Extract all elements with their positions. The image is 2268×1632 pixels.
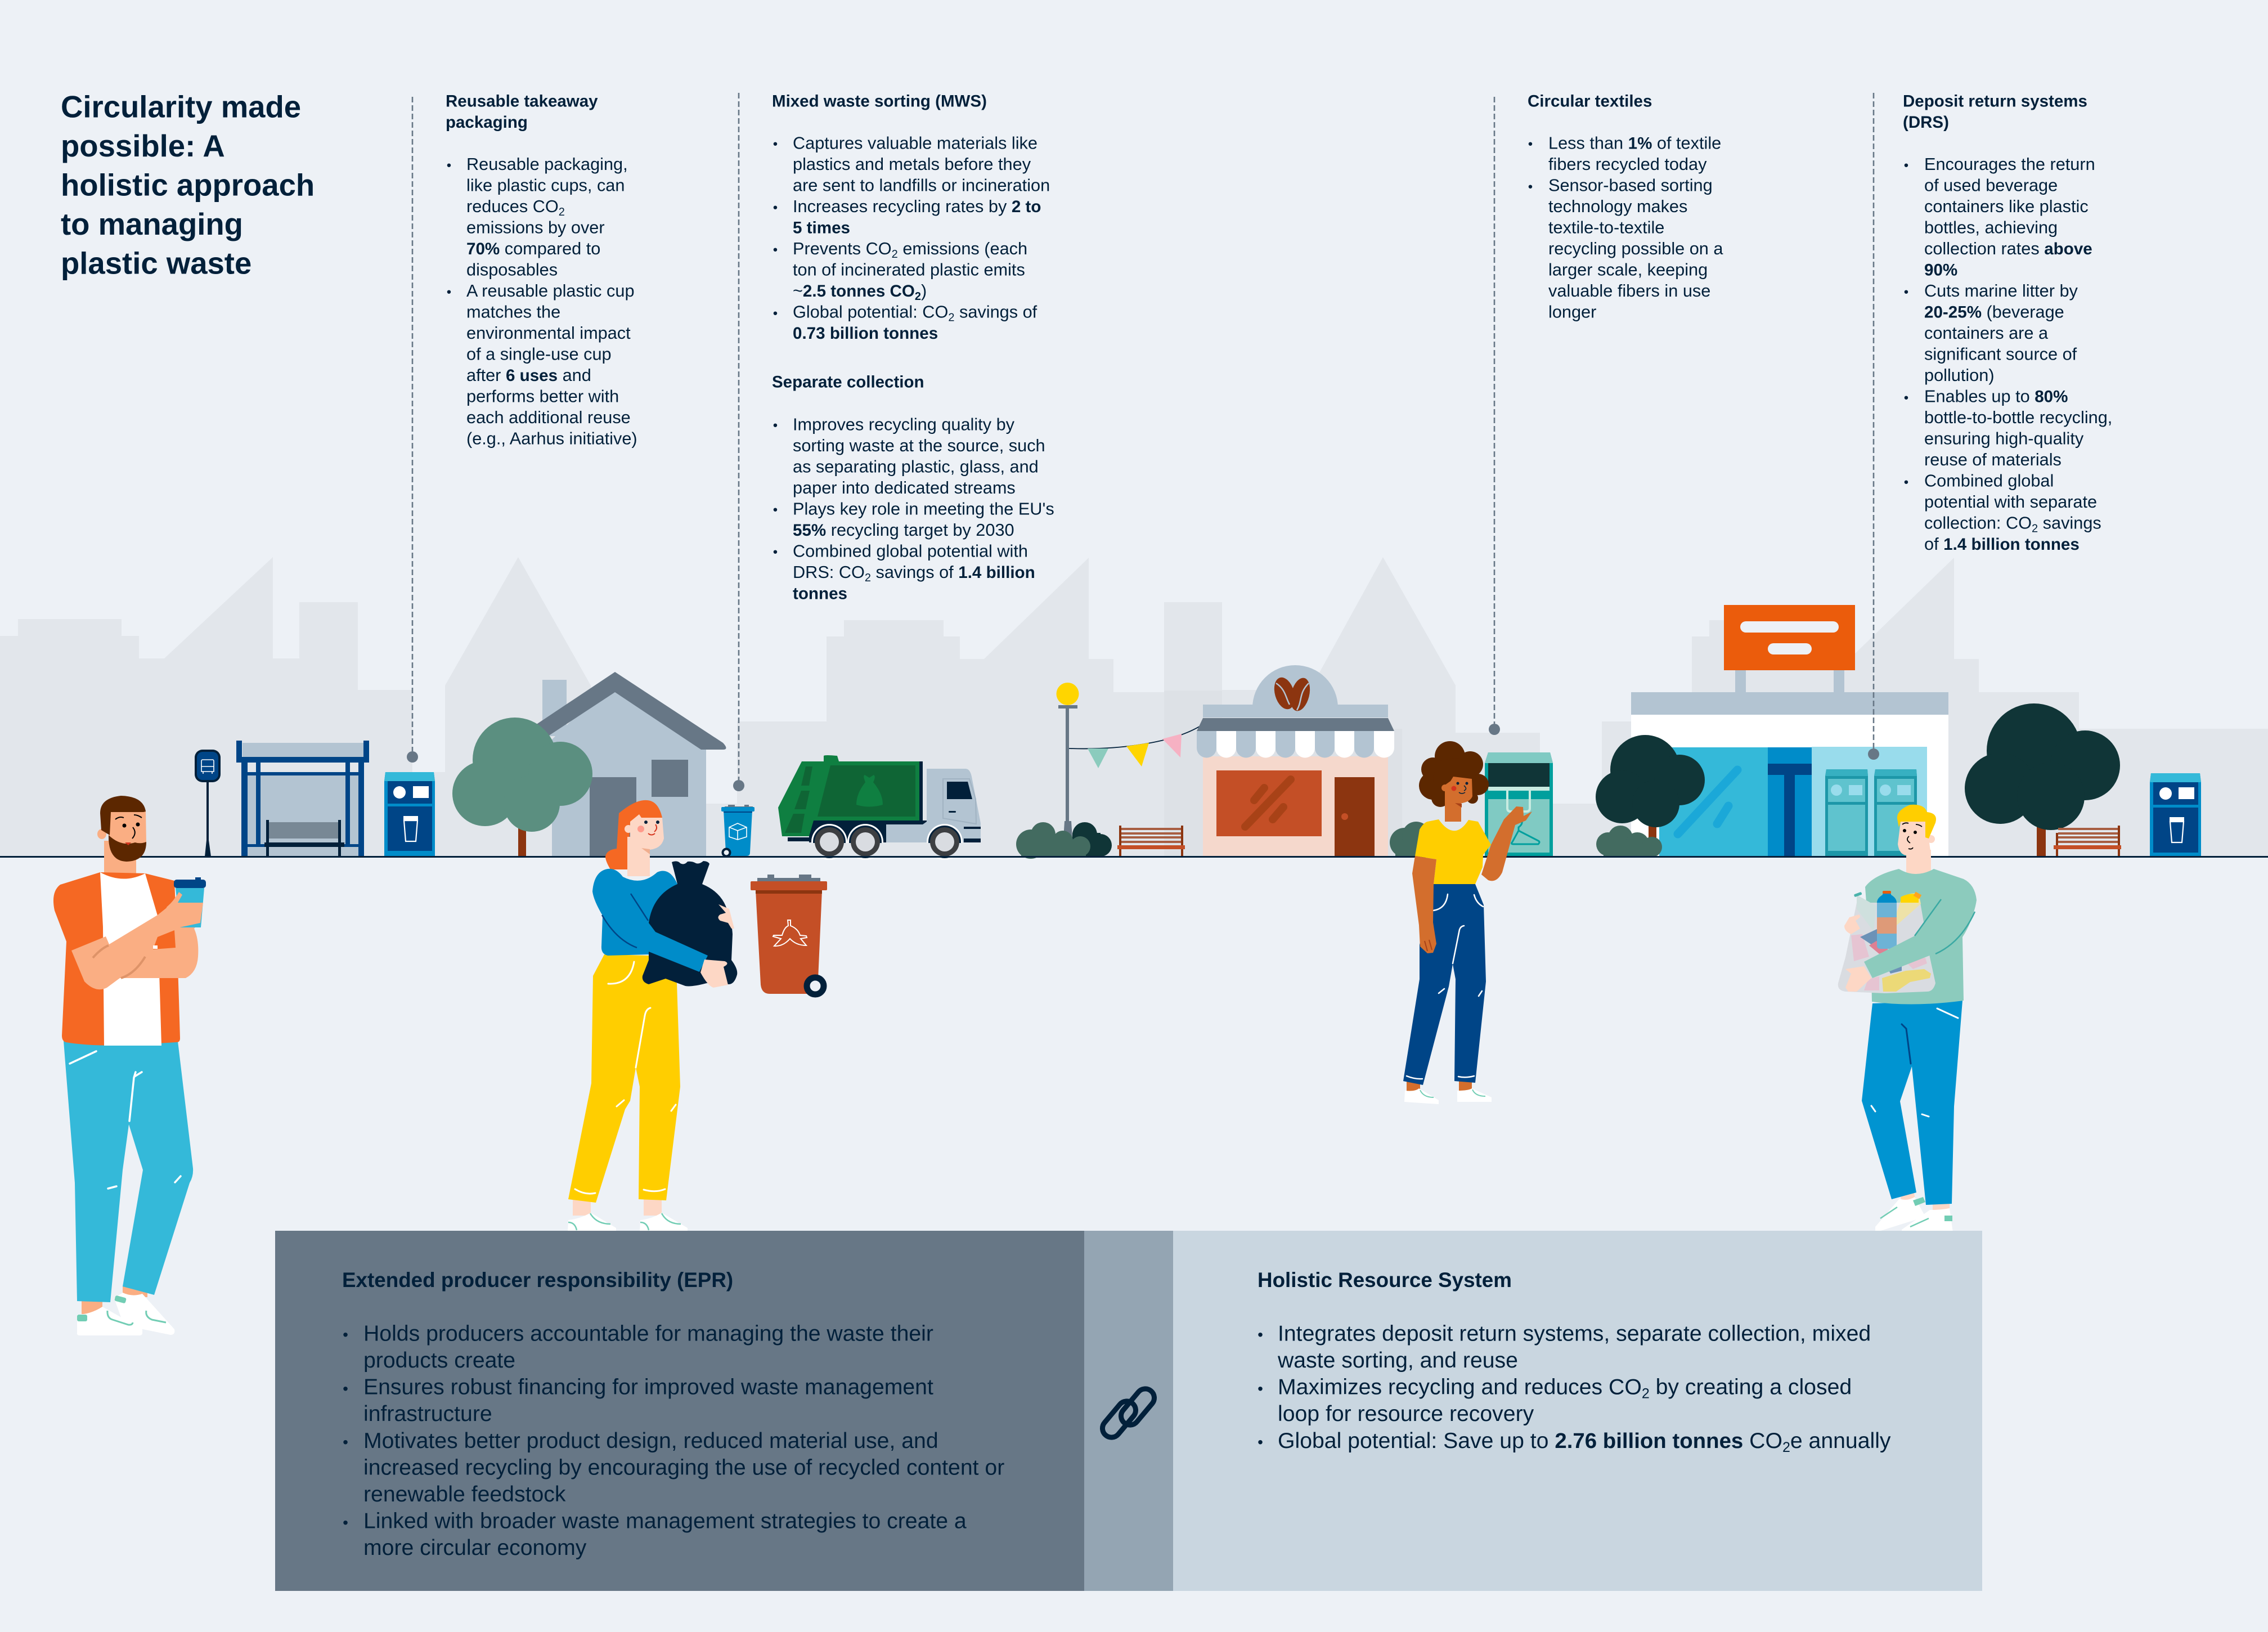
drink return machines in store <box>1825 769 1917 857</box>
text block: reusable takeaway packaging: environmental impact <box>466 323 631 343</box>
text block: mixed waste sorting: 5 times <box>793 218 850 237</box>
panel: holistic resource system: • <box>1257 1326 1263 1343</box>
text block: circular textiles: textile-to-textile <box>1548 217 1664 237</box>
text block: separate collection: 1.4 billion <box>958 563 1035 582</box>
text block: deposit return systems: • <box>1904 285 1908 299</box>
text block: reusable takeaway packaging: of a single-use cup <box>466 344 612 364</box>
text block: deposit return systems: 2 <box>2032 522 2038 535</box>
cup <box>167 877 206 929</box>
neck and face <box>625 814 664 876</box>
bushes by lamp <box>1016 822 1112 859</box>
text block: mixed waste sorting: ton of incinerated plastic emits <box>793 260 1025 279</box>
text block: reusable takeaway packaging: matches the <box>466 302 560 322</box>
garbage truck <box>778 755 981 860</box>
head <box>97 796 146 862</box>
text block: mixed waste sorting: Captures valuable materials like <box>793 133 1038 153</box>
text block: separate collection: 55% recycling target by 2030 <box>793 520 1014 540</box>
panel: holistic resource system: 2 <box>1782 1440 1790 1455</box>
lamp post with bunting <box>1057 683 1201 857</box>
text block: reusable takeaway packaging: after 6 uses and <box>466 365 591 385</box>
text block: deposit return systems: Cuts marine litter by <box>1924 281 2078 301</box>
text block: circular textiles: • <box>1528 136 1533 152</box>
text block: separate collection: DRS: CO <box>793 562 865 582</box>
text block: deposit return systems: pollution) <box>1924 365 1995 385</box>
panel: extended producer responsibility: Holds producers accountable for managing the waste their <box>363 1321 933 1346</box>
text block: circular textiles: Sensor-based sorting <box>1548 176 1713 195</box>
icon: chain link <box>1099 1385 1158 1441</box>
text block: deposit return systems: savings <box>2038 513 2101 532</box>
text block: reusable takeaway packaging: disposables <box>466 260 558 279</box>
shirt <box>53 872 180 1046</box>
text block: reusable takeaway packaging: • <box>447 158 451 173</box>
heading: title: holistic approach <box>61 168 315 203</box>
person: man with reusable cup <box>53 796 206 1335</box>
text block: reusable takeaway packaging: 2 <box>559 206 565 218</box>
shoes <box>77 1293 174 1335</box>
panel: holistic resource system: loop for resource recovery <box>1278 1402 1534 1426</box>
panel: holistic resource system: • <box>1257 1380 1263 1397</box>
panel: holistic resource system: Integrates deposit return systems, separate collection, mixed <box>1278 1321 1871 1346</box>
text block: deposit return systems: of 1.4 billion tonnes <box>1924 534 2080 554</box>
shoes <box>568 1213 688 1232</box>
text block: mixed waste sorting: • <box>773 242 778 258</box>
icon: banana peel <box>773 920 807 946</box>
text block: mixed waste sorting: Global potential: CO <box>793 302 948 322</box>
panel: extended producer responsibility: • <box>343 1514 348 1531</box>
sweater <box>1865 869 1977 1005</box>
text block: separate collection: tonnes <box>793 584 847 603</box>
text block: deposit return systems: 90% <box>1924 261 1957 279</box>
bag <box>643 861 737 986</box>
trousers <box>1403 884 1486 1085</box>
heading: title: to managing <box>61 207 243 241</box>
arm over bag <box>603 894 708 972</box>
text block: reusable takeaway packaging: like plastic cups, can <box>466 176 625 195</box>
text block: reusable takeaway packaging: Reusable takeaway <box>446 92 598 110</box>
text block: mixed waste sorting: 0.73 billion tonnes <box>793 324 938 343</box>
text block: deposit return systems: • <box>1904 158 1908 173</box>
tree: dark small with bush <box>1596 735 1705 857</box>
heading: title <box>61 90 315 280</box>
supermarket sign <box>1724 605 1855 670</box>
text block: separate collection: Separate collection <box>772 373 924 392</box>
city skyline background <box>0 557 2268 857</box>
text block: mixed waste sorting: • <box>773 306 778 321</box>
panel: holistic resource system <box>1173 1231 1982 1591</box>
text block: separate collection: 2 <box>865 572 871 584</box>
hands <box>1844 914 1871 992</box>
reverse vending machine: left <box>384 772 435 857</box>
text block: reusable takeaway packaging: • <box>447 285 451 299</box>
text block: mixed waste sorting: Prevents CO <box>793 239 892 258</box>
panel: extended producer responsibility <box>275 1231 1084 1591</box>
panel: holistic resource system: by creating a closed <box>1650 1375 1852 1399</box>
brown organic waste bin <box>751 875 827 994</box>
text block: reusable takeaway packaging: packaging <box>446 113 528 132</box>
text block: mixed waste sorting: Mixed waste sorting (MWS) <box>772 92 987 110</box>
text block: mixed waste sorting: savings of <box>954 302 1038 322</box>
text block: deposit return systems <box>1903 92 2112 554</box>
reverse vending machine: right <box>2150 773 2201 858</box>
text block: separate collection: • <box>773 502 778 518</box>
text block: deposit return systems: of used beverage <box>1924 176 2058 195</box>
text block: separate collection: • <box>773 545 778 559</box>
panel: extended producer responsibility: products create <box>363 1348 515 1373</box>
panel: holistic resource system: e annually <box>1790 1429 1891 1453</box>
text block: reusable takeaway packaging: performs better with <box>466 386 619 406</box>
person: man carrying bag of bottles <box>1838 805 1977 1232</box>
panel: holistic resource system: 2 <box>1642 1386 1650 1401</box>
panel: extended producer responsibility: infrastructure <box>363 1402 492 1426</box>
sweater <box>592 869 677 956</box>
text block: separate collection: paper into dedicated streams <box>793 478 1016 497</box>
text block: mixed waste sorting: • <box>773 200 778 215</box>
hand and raised arm <box>1481 806 1532 881</box>
text block: mixed waste sorting: ~2.5 tonnes CO <box>793 281 915 301</box>
text block: deposit return systems: • <box>1904 391 1908 405</box>
panel: extended producer responsibility: increased recycling by encouraging the use of recycled content or <box>363 1455 1004 1479</box>
text block: mixed waste sorting: 2 <box>948 312 954 324</box>
panel: extended producer responsibility: • <box>343 1380 348 1397</box>
text block: separate collection: as separating plastic, glass, and <box>793 457 1039 476</box>
text block: reusable takeaway packaging: 70% compared to <box>466 239 600 258</box>
bush beside textile container <box>1390 822 1430 857</box>
panel: holistic resource system: • <box>1257 1433 1263 1451</box>
small blue recycling bin <box>721 805 754 857</box>
text block: reusable takeaway packaging: A reusable plastic cup <box>466 281 635 301</box>
panel: link divider <box>1084 1231 1173 1591</box>
panel: extended producer responsibility: Linked with broader waste management strategies to create a <box>363 1509 967 1533</box>
text block: deposit return systems: • <box>1904 475 1908 490</box>
text block: circular textiles <box>1528 92 1723 322</box>
tree: green <box>452 718 592 857</box>
dashed connector: circular textiles <box>1489 97 1500 735</box>
heading: title: Circularity made <box>61 90 301 124</box>
panel: extended producer responsibility: Ensures robust financing for improved waste management <box>363 1375 933 1399</box>
neck and face <box>1897 805 1936 875</box>
text block: deposit return systems: Deposit return systems <box>1903 92 2087 110</box>
text block: circular textiles: recycling possible on a <box>1548 239 1723 258</box>
trousers <box>1862 1001 1962 1205</box>
text block: separate collection <box>772 373 1054 603</box>
text block: deposit return systems: significant source of <box>1924 344 2077 364</box>
text block: circular textiles: fibers recycled today <box>1548 154 1707 174</box>
hands <box>700 904 734 988</box>
panel: extended producer responsibility: renewable feedstock <box>363 1482 566 1507</box>
text block: deposit return systems: ensuring high-quality <box>1924 429 2084 448</box>
text block: mixed waste sorting: • <box>773 136 778 152</box>
lower arm <box>1412 856 1436 953</box>
shoes <box>1875 1197 1953 1232</box>
house <box>529 672 726 857</box>
text block: deposit return systems: Combined global <box>1924 470 2054 491</box>
panel: extended producer responsibility: more circular economy <box>363 1536 587 1560</box>
text block: deposit return systems: (DRS) <box>1903 113 1949 132</box>
supermarket <box>1631 605 1948 857</box>
shoes <box>1404 1088 1492 1104</box>
text block: deposit return systems: containers like plastic <box>1924 196 2089 216</box>
hair <box>1419 741 1489 807</box>
bench: right <box>2054 826 2121 857</box>
person: woman with clothes hanger <box>1403 741 1532 1104</box>
text block: reusable takeaway packaging <box>446 92 637 448</box>
text block: deposit return systems: potential with separate <box>1924 492 2097 512</box>
text block: reusable takeaway packaging: Reusable packaging, <box>466 154 628 174</box>
text block: circular textiles: technology makes <box>1548 196 1687 216</box>
text block: circular textiles: larger scale, keeping <box>1548 260 1708 279</box>
text block: deposit return systems: bottle-to-bottle recycling, <box>1924 407 2112 427</box>
text block: separate collection: Plays key role in meeting the EU's <box>793 499 1054 519</box>
text block: mixed waste sorting: ) <box>921 281 927 301</box>
text block: mixed waste sorting: are sent to landfills or incineration <box>793 176 1050 195</box>
text block: deposit return systems: Encourages the return <box>1924 154 2095 174</box>
bench: centre <box>1117 826 1185 857</box>
text block: deposit return systems: collection: CO <box>1924 513 2032 532</box>
dashed connector: reusable packaging <box>407 97 418 763</box>
panel: holistic resource system: Global potential: Save up to 2.76 billion tonnes CO <box>1278 1429 1782 1453</box>
text block: reusable takeaway packaging: reduces CO <box>466 196 559 216</box>
text block: mixed waste sorting: 2 <box>892 248 898 261</box>
icon: coffee beans <box>1271 675 1313 713</box>
text block: circular textiles: • <box>1528 179 1533 195</box>
text block: circular textiles: Circular textiles <box>1528 92 1652 110</box>
text block: deposit return systems: reuse of materials <box>1924 450 2062 469</box>
bus shelter <box>236 741 369 857</box>
text block: mixed waste sorting: plastics and metals before they <box>793 154 1031 174</box>
text block: separate collection: Combined global potential with <box>793 541 1028 561</box>
text block: separate collection: • <box>773 418 778 433</box>
text block: separate collection: savings of <box>871 562 958 582</box>
text block: mixed waste sorting: emissions (each <box>898 239 1027 258</box>
text block: deposit return systems: 20-25% (beverage <box>1924 302 2064 322</box>
t-shirt <box>1415 819 1491 884</box>
text block: mixed waste sorting <box>772 92 1050 343</box>
arm in front of bag <box>1864 897 1977 978</box>
trousers <box>64 1041 193 1302</box>
heading: title: plastic waste <box>61 246 251 280</box>
panel: extended producer responsibility: • <box>343 1433 348 1451</box>
tree: dark large <box>1965 703 2120 857</box>
dashed connector: mixed waste sorting <box>733 93 744 791</box>
trousers <box>568 954 680 1203</box>
panel: extended producer responsibility: Extended producer responsibility (EPR) <box>342 1268 733 1292</box>
text block: reusable takeaway packaging: emissions by over <box>466 217 605 237</box>
text block: mixed waste sorting: Increases recycling rates by 2 to <box>793 196 1041 216</box>
clear bag with bottles <box>1838 891 1935 993</box>
text block: separate collection: Improves recycling quality by <box>793 414 1015 434</box>
coffee shop <box>1197 665 1394 857</box>
arms <box>71 892 203 989</box>
text block: deposit return systems: bottles, achieving <box>1924 217 2058 237</box>
bus stop sign <box>195 750 221 857</box>
text block: circular textiles: Less than 1% of textile <box>1548 133 1721 153</box>
text block: deposit return systems: containers are a <box>1924 323 2049 343</box>
text block: circular textiles: longer <box>1548 302 1596 322</box>
panel: holistic resource system: Maximizes recycling and reduces CO <box>1278 1375 1642 1399</box>
panel: extended producer responsibility: • <box>343 1326 348 1343</box>
panel: extended producer responsibility: Motivates better product design, reduced material use, and <box>363 1429 938 1453</box>
textile collection container <box>1485 752 1553 857</box>
text block: deposit return systems: Enables up to 80% <box>1924 386 2068 406</box>
person: woman with rubbish bag <box>568 800 737 1232</box>
text block: separate collection: sorting waste at the source, such <box>793 436 1045 455</box>
hair back <box>605 800 662 869</box>
heading: title: possible: A <box>61 129 225 163</box>
panel: holistic resource system: waste sorting, and reuse <box>1277 1348 1518 1373</box>
ground line <box>0 856 2268 858</box>
text block: reusable takeaway packaging: (e.g., Aarhus initiative) <box>466 429 637 448</box>
text block: circular textiles: valuable fibers in use <box>1548 281 1710 301</box>
text block: mixed waste sorting: 2 <box>915 290 921 303</box>
neck and face <box>1441 777 1472 822</box>
dashed connector: deposit return systems <box>1868 93 1879 760</box>
panel: holistic resource system: Holistic Resource System <box>1257 1268 1512 1292</box>
text block: deposit return systems: collection rates above <box>1924 239 2092 258</box>
text block: reusable takeaway packaging: each additional reuse <box>466 407 631 427</box>
